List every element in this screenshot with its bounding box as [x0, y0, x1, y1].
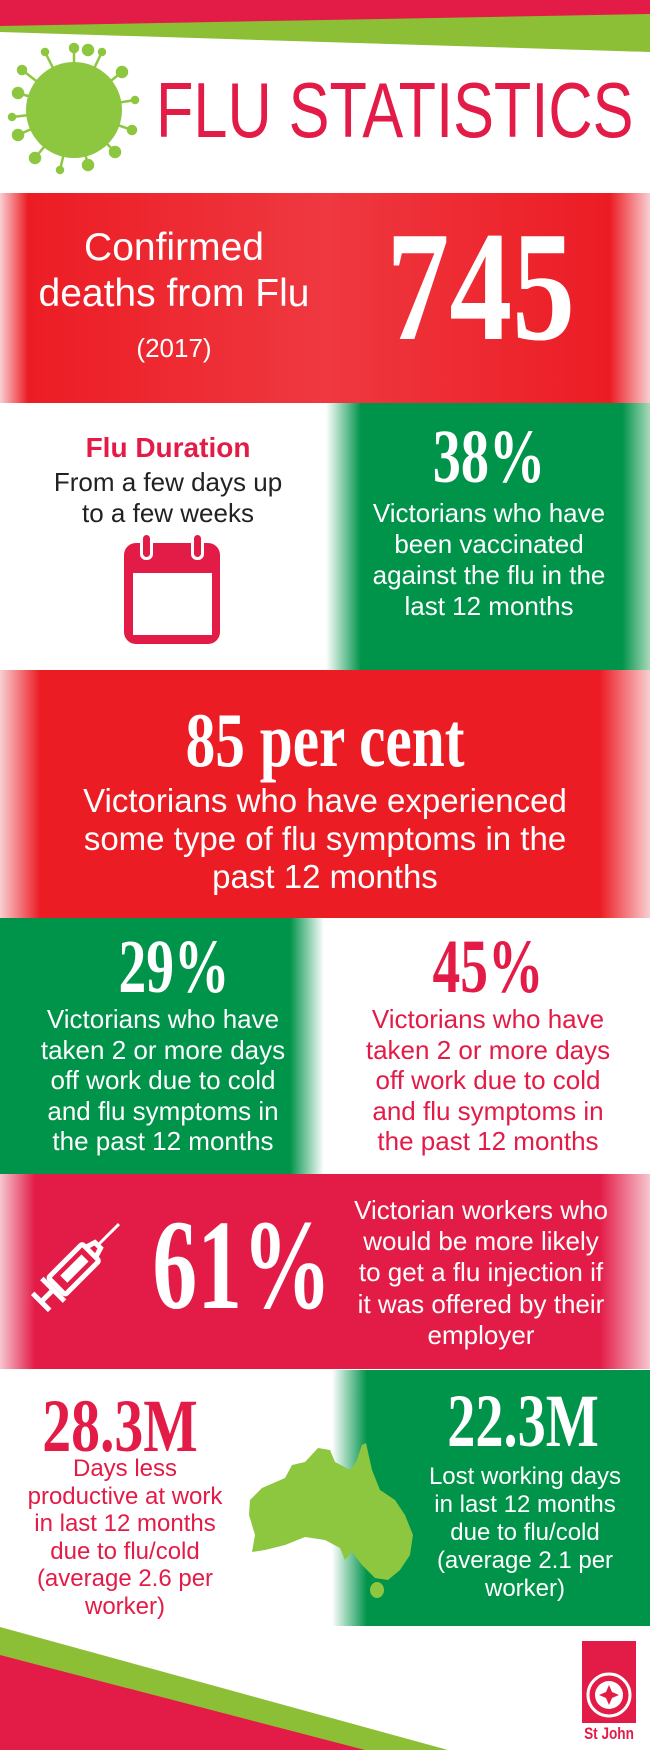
- number: 38%: 38%: [433, 415, 545, 499]
- text: 22.3M detail: [429, 1463, 621, 1602]
- panel: vaccinated (green): [326, 403, 650, 670]
- text: 61% detail: [354, 1195, 608, 1350]
- text: 28.3M detail: worker): [85, 1593, 165, 1620]
- number: 45%: 45%: [433, 925, 543, 1009]
- icon: virus: [8, 42, 140, 174]
- text: 61% detail: would be more likely: [363, 1226, 599, 1256]
- text: 29% detail: Victorians who have: [47, 1004, 279, 1034]
- number: 22.3M: 22.3M: [447, 1380, 599, 1463]
- text: 45% detail: and flu symptoms in: [372, 1096, 604, 1126]
- text: 45% detail: Victorians who have: [372, 1004, 604, 1034]
- text: vaccinated: last 12 months: [404, 591, 574, 621]
- number: 29%: 29%: [119, 925, 229, 1009]
- text: duration detail: [54, 467, 282, 528]
- text: 29% detail: off work due to cold: [50, 1065, 276, 1095]
- bottom banner: [0, 1627, 448, 1750]
- text: symptoms: some type of flu symptoms in the: [84, 820, 566, 857]
- text: symptoms: past 12 months: [212, 858, 438, 895]
- text: 28.3M detail: in last 12 months: [34, 1510, 216, 1537]
- text: 28.3M detail: Days less: [73, 1455, 177, 1482]
- text: 29% detail: taken 2 or more days: [41, 1034, 285, 1064]
- number: 85 per cent: 85 per cent: [186, 697, 464, 783]
- text: 22.3M detail: Lost working days: [429, 1463, 621, 1490]
- text: 29% detail: the past 12 months: [52, 1126, 274, 1156]
- panel: lost working days green: [332, 1370, 650, 1626]
- number: 28.3M: 28.3M: [42, 1385, 198, 1468]
- text: duration detail: to a few weeks: [82, 498, 254, 528]
- panel: 85 per cent: [0, 670, 650, 918]
- panel: 61%: [0, 1174, 650, 1369]
- text: 45% detail: off work due to cold: [376, 1065, 600, 1095]
- text: 61% detail: it was offered by their: [358, 1289, 604, 1319]
- text: confirmed deaths from flu: [39, 226, 309, 315]
- text: 29% detail: and flu symptoms in: [47, 1096, 279, 1126]
- text: symptoms: Victorians who have experienced: [83, 782, 567, 819]
- logo: St John: St John: [584, 1724, 634, 1743]
- text: 61% detail: employer: [428, 1320, 534, 1350]
- text: 2017: (2017): [136, 333, 212, 363]
- text: 28.3M detail: (average 2.6 per: [37, 1565, 213, 1592]
- logo: St John: [582, 1641, 636, 1743]
- panel: 29% green: [0, 918, 324, 1174]
- text: duration detail: From a few days up: [54, 467, 282, 497]
- text: vaccinated: Victorians who have: [373, 498, 605, 528]
- panel: confirmed deaths: [0, 193, 650, 403]
- text: 22.3M detail: due to flu/cold: [450, 1519, 600, 1546]
- text: 61% detail: Victorian workers who: [354, 1195, 608, 1225]
- text: 45% detail: the past 12 months: [377, 1126, 599, 1156]
- number: 745: 745: [387, 199, 575, 373]
- number: 61%: 61%: [152, 1194, 332, 1336]
- icon: australia map: [249, 1443, 413, 1598]
- text: confirmed deaths from flu: deaths from Flu: [39, 272, 309, 315]
- text: 28.3M detail: due to flu/cold: [50, 1538, 200, 1565]
- text: vaccinated: been vaccinated: [394, 529, 584, 559]
- title: FLU STATISTICS: [156, 66, 633, 154]
- text: flu duration: Flu Duration: [86, 432, 250, 463]
- text: 28.3M detail: productive at work: [28, 1483, 222, 1510]
- text: 22.3M detail: in last 12 months: [434, 1491, 616, 1518]
- text: 61% detail: to get a flu injection if: [359, 1257, 603, 1287]
- icon: syringe: [31, 1223, 120, 1312]
- text: 28.3M detail: [28, 1455, 222, 1620]
- text: vaccinated: [373, 498, 605, 621]
- text: 22.3M detail: (average 2.1 per: [437, 1547, 613, 1574]
- text: 45% detail: taken 2 or more days: [366, 1034, 610, 1064]
- text: 22.3M detail: worker): [485, 1575, 565, 1602]
- text: confirmed deaths from flu: Confirmed: [84, 226, 264, 269]
- text: vaccinated: against the flu in the: [373, 560, 605, 590]
- top banner: [0, 0, 650, 52]
- text: 45% detail: [366, 1004, 610, 1156]
- text: 29% detail: [41, 1004, 285, 1156]
- text: symptoms: [83, 782, 567, 895]
- icon: calendar: [124, 535, 220, 644]
